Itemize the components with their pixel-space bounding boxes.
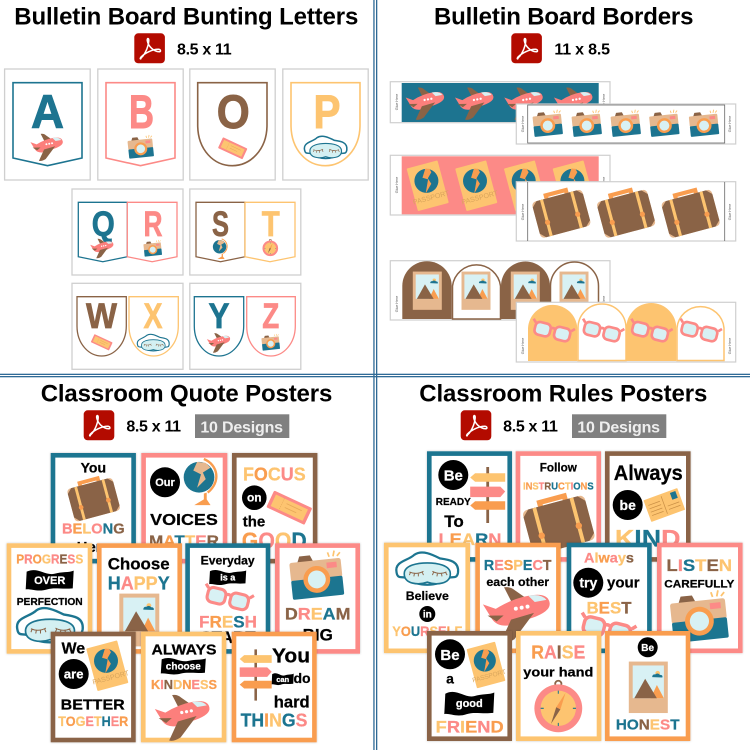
- border strip: planes: [390, 82, 610, 123]
- poster: be honest: [607, 633, 688, 739]
- poster: you belong here: You: [81, 460, 106, 476]
- badge: designs: [195, 414, 289, 438]
- poster: be ready to learn: LEARN: [438, 530, 502, 549]
- poster: respect each other: each other: [486, 575, 549, 589]
- badge: designs: [572, 414, 666, 438]
- poster: be a good friend: PASSPORT: [472, 669, 507, 684]
- poster: always try your best: try: [579, 574, 597, 590]
- poster: we are better together: [53, 634, 133, 740]
- poster: be a good friend: a: [446, 670, 454, 686]
- card: letter P shield: P: [314, 85, 340, 138]
- poster: believe in yourself: [386, 545, 468, 651]
- poster: focus on the good: GOOD: [242, 527, 307, 553]
- border strip: cameras: Glue Here: [728, 116, 732, 132]
- poster: progress over perfection: PERFECTION: [17, 596, 83, 608]
- poster: we are better together: We: [61, 640, 85, 657]
- poster: everyday is a fresh start: [188, 546, 268, 651]
- poster: believe in yourself: YOURSELF: [392, 623, 463, 639]
- poster: be honest: Be: [641, 643, 655, 654]
- poster: follow instructions: [518, 454, 599, 559]
- card: letter B pennant: [98, 69, 183, 180]
- poster: progress over perfection: OVER: [34, 575, 65, 587]
- card: letter B pennant: B: [129, 85, 154, 138]
- card: letters Q and R: R: [144, 205, 162, 244]
- poster: raise your hand: [518, 633, 599, 739]
- border strip: photo arches: [390, 261, 610, 320]
- poster: you can do hard things: do: [293, 670, 311, 686]
- heading: quote posters: Classroom Quote Posters: [41, 381, 332, 408]
- poster: choose happy: [99, 546, 180, 651]
- poster: you can do hard things: [234, 634, 314, 740]
- poster: follow instructions: Follow: [540, 461, 577, 475]
- poster: be a good friend: good: [456, 698, 483, 710]
- poster: raise your hand: your hand: [523, 665, 593, 680]
- poster: be ready to learn: [429, 454, 510, 559]
- poster: be a good friend: [429, 633, 510, 739]
- card: letters Y and Z: Z: [262, 297, 279, 336]
- poster: our voices matter: [144, 455, 225, 561]
- poster: progress over perfection: PROGRESS: [16, 551, 83, 566]
- border strip: passports: PASSPORT: [461, 190, 500, 206]
- card: letters S and T: S: [212, 205, 229, 244]
- border strip: glasses arches: [516, 302, 736, 362]
- poster: focus on the good: FOCUS: [243, 464, 306, 484]
- poster: you belong here: BELONG: [62, 520, 125, 537]
- poster: always be kind: [607, 454, 688, 559]
- poster: listen carefully: LISTEN: [666, 556, 732, 575]
- poster: follow instructions: INSTRUCTIONS: [523, 481, 594, 492]
- card: letters W and X: [72, 283, 183, 369]
- badge: designs: 10 Designs: [577, 419, 660, 436]
- poster: always try your best: [569, 545, 649, 651]
- border strip: cameras: [516, 104, 736, 144]
- poster: dream big: [277, 546, 358, 651]
- poster: always try your best: Always: [584, 550, 634, 566]
- poster: you belong here: [53, 455, 134, 561]
- icon: pdf: [511, 33, 542, 63]
- card: letters S and T: [190, 189, 301, 275]
- poster: everyday is a fresh start: FRESH: [199, 612, 257, 631]
- border strip: glasses arches: Glue Here: [521, 338, 525, 354]
- border strip: glasses arches: Glue Here: [728, 338, 732, 354]
- poster: our voices matter: MATTER: [149, 534, 219, 551]
- border strip: passports: Glue Here: [395, 177, 399, 193]
- poster: always be kind: Always: [614, 462, 683, 485]
- poster: we are better together: BETTER: [61, 696, 125, 713]
- border strip: suitcases: Glue Here: [521, 204, 525, 220]
- poster: believe in yourself: Believe: [406, 589, 449, 603]
- panel: bulletin board bunting letters: [5, 4, 368, 369]
- poster: you can do hard things: can: [276, 675, 290, 684]
- border strip: passports: PASSPORT: [412, 190, 451, 206]
- size label: 8.5 x 11: [503, 419, 558, 436]
- poster: be ready to learn: To: [444, 512, 464, 531]
- card: letter O shield: O: [217, 85, 250, 138]
- border strip: suitcases: Glue Here: [728, 204, 732, 220]
- poster: everyday is a fresh start: is a: [220, 573, 236, 583]
- icon: pdf: [84, 410, 114, 440]
- panel: classroom rules posters: [386, 381, 740, 739]
- card: letters Q and R: [72, 189, 183, 275]
- border strip: passports: [390, 155, 610, 215]
- poster: our voices matter: VOICES: [150, 512, 218, 529]
- poster: always try your best: your: [607, 574, 640, 591]
- poster: dream big: BIG: [303, 626, 333, 645]
- poster: listen carefully: [659, 545, 740, 651]
- card: letter A pennant: [5, 69, 90, 180]
- card: letters W and X: X: [144, 297, 163, 336]
- heading: bunting letters: Bulletin Board Bunting Letters: [14, 4, 358, 31]
- card: letters Q and R: Q: [92, 205, 115, 244]
- poster: always choose kindness: [143, 634, 224, 743]
- poster: you can do hard things: THINGS: [241, 711, 307, 731]
- panel: classroom quote posters: [9, 381, 358, 743]
- poster: we are better together: PASSPORT: [92, 670, 131, 686]
- card: letter P shield: [283, 69, 368, 180]
- badge: designs: 10 Designs: [200, 419, 283, 436]
- poster: we are better together: are: [64, 666, 83, 682]
- poster: focus on the good: on: [247, 491, 262, 505]
- poster: we are better together: TOGETHER: [58, 713, 128, 729]
- card: letters W and X: W: [86, 297, 117, 336]
- poster: always be kind: KIND: [615, 526, 681, 553]
- border strip: photo arches: Glue Here: [602, 296, 606, 312]
- poster: be a good friend: Be: [440, 647, 460, 664]
- poster: respect each other: RESPECT: [484, 557, 552, 574]
- border strip: passports: Glue Here: [602, 177, 606, 193]
- poster: focus on the good: [234, 455, 315, 561]
- poster: always choose kindness: KINDNESS: [151, 677, 217, 692]
- poster: you can do hard things: You: [272, 645, 310, 667]
- poster: everyday is a fresh start: START: [200, 628, 256, 647]
- border strip: planes: Glue Here: [395, 94, 399, 110]
- poster: always be kind: be: [620, 497, 636, 513]
- poster: you can do hard things: hard: [274, 692, 310, 711]
- poster: respect each other: [478, 545, 558, 651]
- card: letters S and T: T: [262, 205, 280, 244]
- poster: progress over perfection: [9, 546, 90, 651]
- card: letters Y and Z: Y: [208, 297, 230, 336]
- poster: focus on the good: the: [243, 514, 265, 531]
- poster: choose happy: Choose: [108, 554, 170, 573]
- icon: pdf: [134, 33, 165, 63]
- poster: be a good friend: FRIEND: [436, 717, 504, 736]
- poster: always choose kindness: choose: [166, 662, 201, 672]
- panel: bulletin board borders: [390, 4, 736, 362]
- size label: 8.5 x 11: [126, 419, 181, 436]
- poster: dream big: DREAM: [285, 604, 351, 623]
- icon: pdf: [461, 410, 491, 440]
- poster: listen carefully: CAREFULLY: [664, 578, 735, 590]
- heading: rules posters: Classroom Rules Posters: [419, 381, 707, 408]
- poster: be honest: HONEST: [616, 716, 680, 733]
- heading: borders: Bulletin Board Borders: [434, 4, 693, 31]
- border strip: suitcases: [516, 182, 736, 241]
- card: letter O shield: [190, 69, 275, 180]
- poster: our voices matter: Our: [155, 477, 175, 489]
- border strip: cameras: Glue Here: [521, 116, 525, 132]
- poster: everyday is a fresh start: Everyday: [201, 553, 255, 567]
- size label: 8.5 x 11: [177, 41, 232, 58]
- poster: always choose kindness: ALWAYS: [152, 641, 216, 658]
- poster: always try your best: BEST: [586, 598, 632, 617]
- border strip: photo arches: Glue Here: [395, 296, 399, 312]
- poster: be ready to learn: Be: [444, 468, 463, 484]
- card: letters Y and Z: [190, 283, 301, 369]
- border strip: planes: Glue Here: [602, 94, 606, 110]
- poster: you belong here: Here: [77, 539, 110, 556]
- poster: choose happy: HAPPY: [108, 573, 170, 593]
- poster: be ready to learn: READY: [436, 497, 471, 508]
- poster: believe in yourself: in: [423, 610, 432, 620]
- card: letter A pennant: A: [31, 85, 64, 138]
- poster: raise your hand: RAISE: [531, 642, 585, 662]
- size label: 11 x 8.5: [554, 41, 610, 58]
